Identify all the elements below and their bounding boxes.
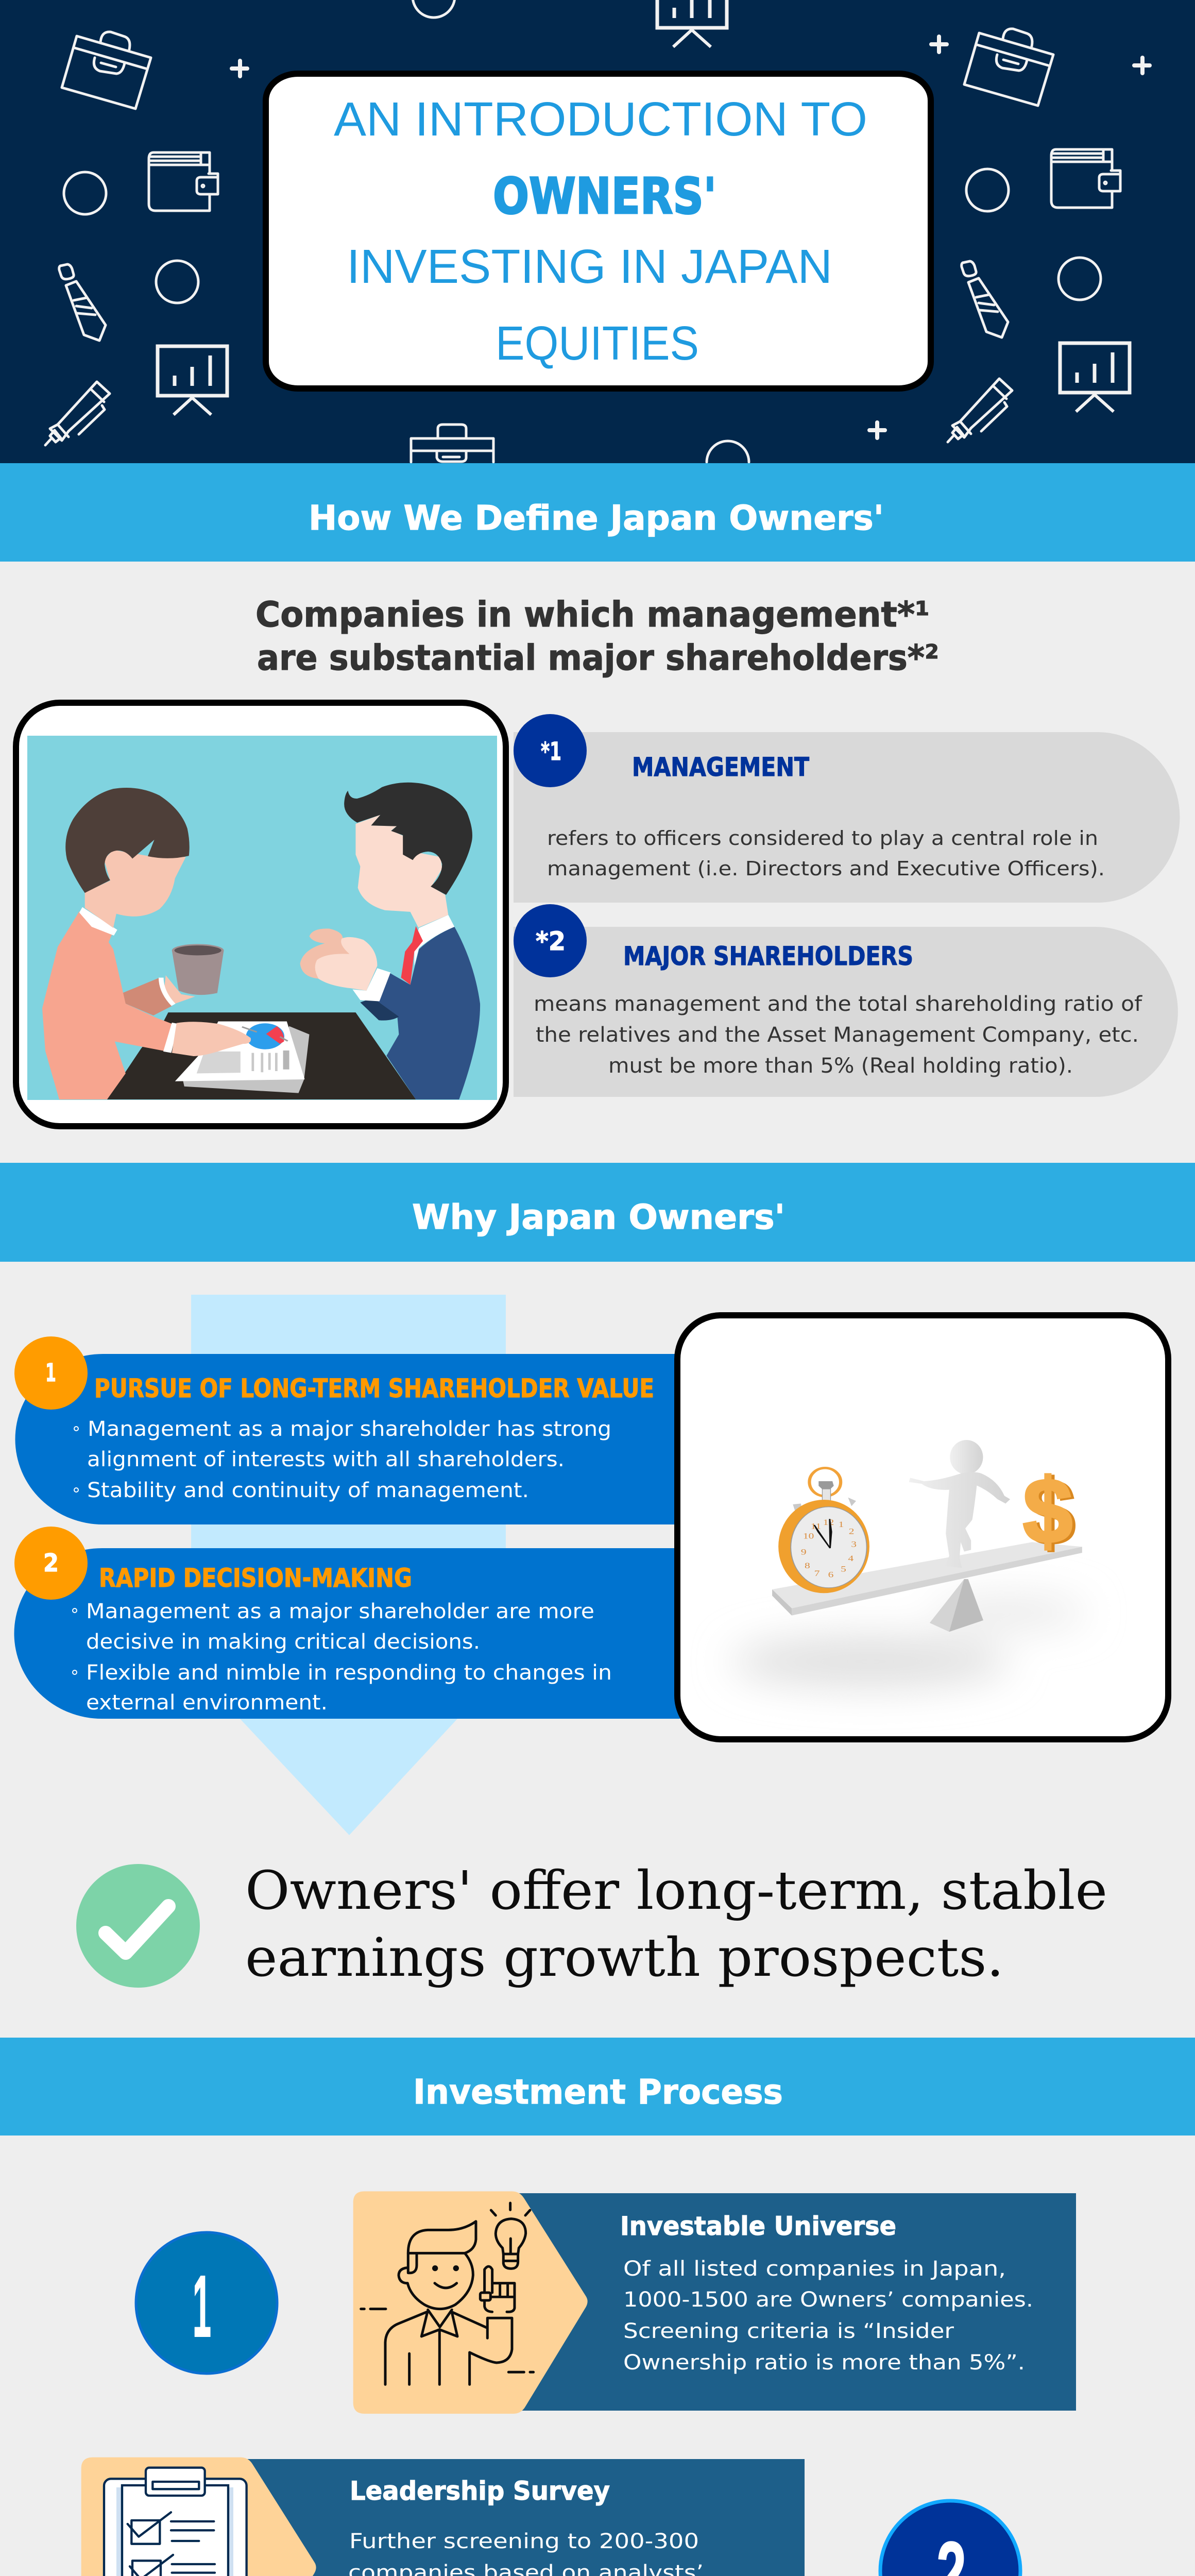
step 1 text: Screening criteria is “Insider	[623, 2319, 954, 2343]
heading: pursue of long-term shareholder value: PURSUE OF LONG-TERM SHAREHOLDER VALUE	[94, 1374, 654, 1403]
step 1 text: Of all listed companies in Japan,	[623, 2257, 1006, 2281]
panel: reason 2	[14, 1527, 680, 1719]
step 1 text: 1000-1500 are Owners’ companies.	[623, 2288, 1033, 2312]
stopwatch: 6	[828, 1570, 833, 1580]
bullets: Flexible and nimble in responding to changes in	[86, 1661, 612, 1685]
bullets: external environment.	[86, 1691, 328, 1715]
figure	[909, 1440, 1010, 1568]
icon: wallet	[149, 152, 218, 211]
step 1 text	[623, 2257, 1033, 2375]
heading: rapid decision-making: RAPID DECISION-MAKING	[99, 1563, 412, 1593]
section band: How We Define Japan Owners': How We Define Japan Owners'	[309, 498, 884, 538]
heading: management: MANAGEMENT	[632, 752, 809, 782]
section band: Investment Process	[0, 2038, 1195, 2136]
table	[107, 1012, 416, 1099]
stopwatch: 7	[814, 1569, 820, 1578]
icon: marker pen	[45, 382, 110, 445]
conclusion: check icon and statement	[76, 1860, 1107, 1989]
icon: second circle	[156, 261, 198, 303]
bullets: Management as a major shareholder has strong	[88, 1417, 611, 1441]
badge: *1: *1	[541, 737, 561, 766]
badge: 2	[14, 1527, 88, 1600]
arrow: large pale down arrow	[191, 1295, 506, 1835]
icon: top board	[657, 0, 727, 47]
badge: *2	[514, 904, 587, 977]
statement text: earnings growth prospects.	[245, 1927, 1004, 1989]
left person	[42, 788, 224, 1099]
management definition text: management (i.e. Directors and Executive Officers).	[547, 857, 1105, 880]
definition card: major shareholders	[514, 904, 1178, 1097]
icon: plus bottom	[869, 422, 885, 438]
bullets: alignment of interests with all shareholders.	[87, 1448, 565, 1471]
step 1 card: Investable Universe	[353, 2191, 1076, 2414]
step 1 heading: Investable Universe	[620, 2211, 896, 2241]
management definition text	[547, 827, 1105, 880]
stopwatch	[778, 1468, 869, 1593]
badge: 2: 2	[43, 1549, 59, 1578]
icon: check mark	[76, 1864, 200, 1988]
definition headline: Companies in which management*¹	[255, 595, 930, 635]
hero banner	[0, 0, 1195, 463]
step 1 number: 1	[193, 2258, 211, 2355]
icon: plus right 1	[931, 37, 947, 52]
badge: 1	[14, 1336, 88, 1410]
step 2 text	[348, 2530, 782, 2576]
dollar sign: $	[1023, 1460, 1072, 1562]
icon: plus	[232, 61, 247, 76]
panel: balance illustration	[677, 1315, 1168, 1739]
section band: Why Japan Owners': Why Japan Owners'	[412, 1197, 785, 1237]
title line 3: INVESTING IN JAPAN	[347, 240, 832, 293]
step 2 card: Leadership Survey	[81, 2458, 805, 2576]
bullets: decisive in making critical decisions.	[86, 1630, 480, 1654]
step 2 text: Further screening to 200-300	[349, 2530, 699, 2553]
bullets: Stability and continuity of management.	[87, 1479, 529, 1502]
pivot	[930, 1579, 983, 1632]
section band: Investment Process: Investment Process	[413, 2072, 783, 2112]
stopwatch: 9	[801, 1548, 807, 1557]
stopwatch: 3	[851, 1540, 857, 1549]
right person	[300, 783, 480, 1099]
icon: presentation board	[158, 346, 227, 415]
seesaw beam	[772, 1542, 1082, 1616]
stopwatch: 12	[823, 1518, 834, 1527]
badge: 1: 1	[45, 1359, 56, 1387]
document and pie chart	[175, 1022, 310, 1093]
icon: checklist clipboard	[81, 2458, 316, 2576]
title card	[266, 74, 931, 388]
major shareholders definition text	[534, 992, 1142, 1078]
icon: bottom circle	[707, 441, 749, 462]
icon: briefcase	[62, 32, 151, 109]
bullets: Management as a major shareholder are more	[86, 1600, 594, 1623]
pointing hand	[163, 1022, 251, 1056]
badge: *2: *2	[536, 926, 566, 956]
definition card: management	[514, 714, 1180, 903]
bullets	[74, 1417, 611, 1502]
step 2 heading: Leadership Survey	[350, 2476, 610, 2506]
statement text: Owners' offer long-term, stable	[245, 1860, 1107, 1922]
stopwatch: 11	[811, 1522, 821, 1531]
definition headline	[255, 595, 939, 679]
management definition text: refers to officers considered to play a central role in	[547, 827, 1098, 850]
icon set: right column of business icons	[948, 29, 1150, 442]
stopwatch: 8	[805, 1561, 810, 1570]
badge: *1	[514, 714, 587, 787]
panel: meeting illustration	[16, 703, 506, 1126]
stopwatch: 4	[848, 1554, 854, 1563]
icon: necktie	[59, 264, 106, 341]
icon: top circle	[413, 0, 455, 18]
major shareholders definition text: must be more than 5% (Real holding ratio).	[608, 1054, 1073, 1078]
bullets	[73, 1600, 612, 1715]
section band: How We Define Japan Owners'	[0, 463, 1195, 562]
icon set: left column of business icons	[45, 32, 247, 445]
major shareholders definition text: means management and the total shareholding ratio of	[534, 992, 1142, 1016]
definition headline: are substantial major shareholders*²	[257, 638, 939, 679]
step 1 text: Ownership ratio is more than 5%”.	[623, 2351, 1025, 2375]
statement text	[245, 1860, 1107, 1989]
step 2 number	[880, 2501, 1020, 2576]
icon: circle	[64, 172, 106, 214]
panel: reason 1	[14, 1336, 680, 1524]
icon: idea person	[353, 2191, 588, 2414]
dollar sign: $	[1026, 1461, 1076, 1564]
step 1 number	[136, 2232, 277, 2374]
stopwatch: 2	[849, 1527, 854, 1536]
heading: major shareholders: MAJOR SHAREHOLDERS	[623, 941, 913, 971]
section band: Why Japan Owners'	[0, 1163, 1195, 1262]
title line 1: AN INTRODUCTION TO	[334, 92, 867, 146]
title line 2: OWNERS'	[493, 167, 716, 225]
title line 4: EQUITIES	[496, 316, 699, 370]
stopwatch: 1	[839, 1520, 844, 1529]
floor shadow	[731, 1597, 1087, 1687]
stopwatch: 10	[803, 1532, 814, 1541]
major shareholders definition text: the relatives and the Asset Management Company, etc.	[536, 1023, 1139, 1047]
icon: bottom briefcase	[411, 425, 493, 462]
stopwatch: 5	[841, 1565, 846, 1574]
